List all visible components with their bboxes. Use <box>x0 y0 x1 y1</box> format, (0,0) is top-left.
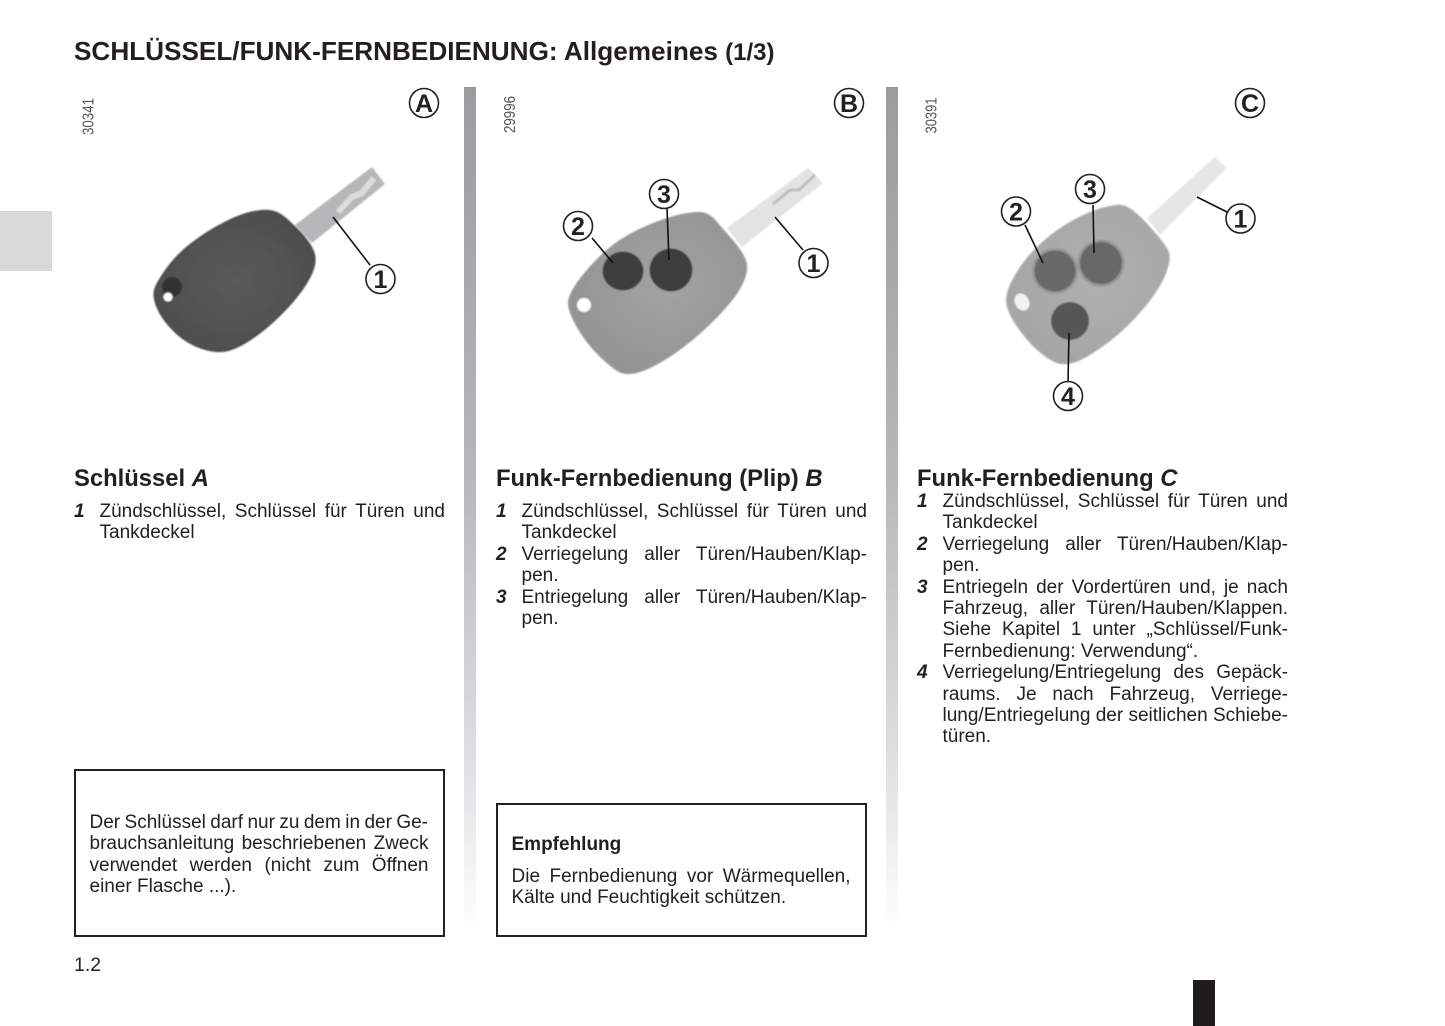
list A: 1 <box>74 501 85 522</box>
list B: 2 <box>496 544 507 565</box>
list C: Tankdeckel <box>942 512 1038 533</box>
list C: Verriegelung aller Türen/Hauben/Klap- <box>942 534 1288 555</box>
warning text: brauchsanleitung beschriebenen Zweck <box>90 833 428 854</box>
badge A: A <box>415 90 433 118</box>
list C: pen. <box>942 555 979 576</box>
key body C <box>1007 206 1169 363</box>
callouts B: 2 <box>571 213 585 241</box>
badge C <box>1236 88 1264 118</box>
key blade A <box>295 167 385 243</box>
list B <box>496 501 867 629</box>
recommendation text: Kälte und Feuchtigkeit schützen. <box>512 887 786 908</box>
recommendation text <box>512 866 850 908</box>
list C: Siehe Kapitel 1 unter „Schlüssel/Funk- <box>942 619 1288 640</box>
callouts B <box>564 180 828 278</box>
callouts B: 3 <box>657 181 671 209</box>
list B: Zündschlüssel, Schlüssel für Türen und <box>522 501 867 522</box>
list B: 3 <box>496 587 507 608</box>
list C: Zündschlüssel, Schlüssel für Türen und <box>942 491 1288 512</box>
list B: pen. <box>522 565 558 586</box>
image code C: 30391 <box>924 97 940 134</box>
recommendation heading: Empfehlung <box>512 834 621 855</box>
key blade B <box>727 168 823 247</box>
list B: Tankdeckel <box>522 522 617 543</box>
badge B: B <box>840 90 858 118</box>
warning text: verwendet werden (nicht zum Öffnen <box>90 855 428 876</box>
badge C: C <box>1241 90 1259 118</box>
figure A: key <box>80 88 438 351</box>
list B: pen. <box>522 608 558 629</box>
callouts C: 3 <box>1083 176 1097 204</box>
list C: raums. Je nach Fahrzeug, Verriege- <box>942 684 1288 705</box>
figure B: two-button remote <box>502 88 864 373</box>
callout 1: 1 <box>374 266 388 294</box>
key body B <box>569 213 746 373</box>
badge A <box>410 88 438 118</box>
list B: Entriegelung aller Türen/Hauben/Klap- <box>522 587 867 608</box>
list C: 1 <box>917 491 928 512</box>
side tab <box>0 211 52 271</box>
column divider right <box>886 87 898 932</box>
list C: lung/Entriegelung der seitlichen Schiebe- <box>942 705 1288 726</box>
callouts C <box>1002 174 1255 411</box>
heading: Funk-Fernbedienung C: Funk-Fernbedienung C <box>917 465 1177 492</box>
badge B <box>834 88 864 118</box>
list C: 2 <box>917 534 928 555</box>
key body A <box>154 211 315 351</box>
figure C: three-button remote <box>924 88 1264 411</box>
page number: 1.2 <box>74 954 101 976</box>
warning text: Der Schlüssel darf nur zu dem in der Ge- <box>90 812 428 833</box>
black edge marker <box>1193 980 1215 1026</box>
warning text <box>90 812 428 897</box>
list C <box>916 491 1288 747</box>
list A: Zündschlüssel, Schlüssel für Türen und <box>100 501 445 522</box>
column divider left <box>464 87 476 932</box>
list B: Verriegelung aller Türen/Hauben/Klap- <box>522 544 867 565</box>
list A: Tankdeckel <box>100 522 195 543</box>
list C: 3 <box>917 577 928 598</box>
list C: 4 <box>917 662 928 683</box>
illustrations <box>80 88 1266 412</box>
callout box: key warning <box>74 769 445 937</box>
recommendation text: Die Fernbedienung vor Wärmequellen, <box>512 866 850 887</box>
callouts C: 2 <box>1009 198 1023 226</box>
key blade C <box>1147 157 1227 235</box>
title: SCHLÜSSEL/FUNK-FERNBEDIENUNG: Allgemeines (1/3) <box>74 36 775 66</box>
callout 1 <box>333 217 395 294</box>
warning text: einer Flasche ...). <box>90 876 236 897</box>
callouts B: 1 <box>807 250 821 278</box>
callouts C: 4 <box>1061 383 1075 411</box>
list C: Entriegeln der Vordertüren und, je nach <box>942 577 1288 598</box>
callouts C: 1 <box>1234 206 1248 234</box>
list B: 1 <box>496 501 507 522</box>
image code A: 30341 <box>80 98 98 135</box>
image code B: 29996 <box>502 96 519 133</box>
heading: Funk-Fernbedienung (Plip) B: Funk-Fernbedienung (Plip) B <box>496 465 823 492</box>
list A <box>74 501 445 543</box>
list C: Verriegelung/Entriegelung des Gepäck- <box>942 662 1288 683</box>
list C: Fahrzeug, aller Türen/Hauben/Klappen. <box>942 598 1288 619</box>
list C: türen. <box>942 726 991 747</box>
callout box: recommendation <box>496 803 866 937</box>
list C: Fernbedienung: Verwendung“. <box>942 641 1198 662</box>
heading: Schlüssel A: Schlüssel A <box>74 465 209 492</box>
